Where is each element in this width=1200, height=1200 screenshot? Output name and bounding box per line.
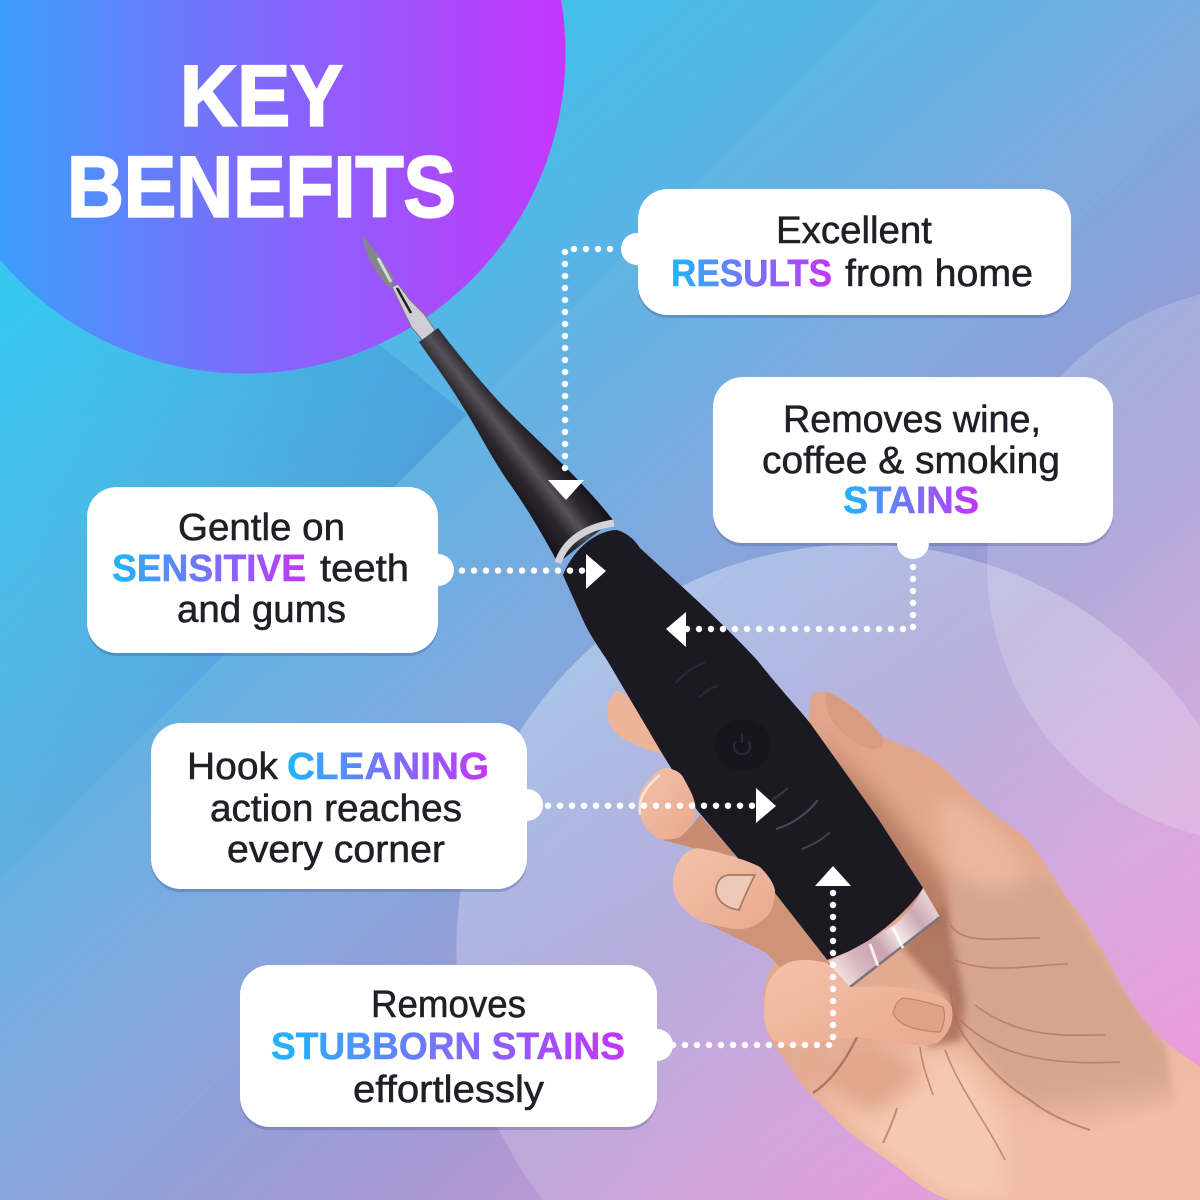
title: KEY: KEY bbox=[180, 48, 343, 144]
callout: stubborn stains bbox=[240, 965, 673, 1130]
palm creases bbox=[813, 925, 1120, 1160]
palm and thumb bbox=[763, 692, 1200, 1200]
line 2: coffee & smoking bbox=[762, 440, 1060, 482]
highlight: CLEANING bbox=[287, 746, 489, 788]
title: BENEFITS: BENEFITS bbox=[67, 140, 456, 236]
arrow bbox=[586, 554, 606, 589]
hand shading bbox=[815, 735, 1200, 1200]
lower finger nail bbox=[893, 998, 944, 1032]
thumb nail bbox=[826, 692, 884, 749]
connector: stains bbox=[666, 567, 913, 647]
line 1: Excellent bbox=[776, 210, 932, 252]
arrow bbox=[815, 866, 851, 886]
highlight: STAINS bbox=[843, 480, 979, 522]
callout: sensitive bbox=[87, 487, 454, 656]
title badge bbox=[0, 0, 566, 374]
highlight: STUBBORN STAINS bbox=[271, 1026, 625, 1068]
device: chrome collar bbox=[558, 523, 614, 563]
line 1: Hook bbox=[187, 746, 279, 788]
callout: cleaning bbox=[151, 723, 543, 892]
lower finger bbox=[764, 960, 952, 1047]
highlight: RESULTS bbox=[671, 253, 832, 295]
line 2: action reaches bbox=[210, 788, 462, 830]
highlight: SENSITIVE bbox=[112, 548, 306, 590]
callout: results bbox=[621, 189, 1071, 318]
second finger nail edge bbox=[640, 775, 660, 815]
arrow bbox=[548, 480, 584, 500]
line 3: and gums bbox=[177, 589, 346, 631]
second finger bbox=[638, 768, 695, 839]
finger web shadow bbox=[663, 815, 737, 857]
indicator arcs bbox=[675, 662, 830, 849]
arrow bbox=[756, 788, 776, 823]
line 3: every corner bbox=[227, 829, 445, 871]
line 2: teeth bbox=[320, 548, 409, 590]
device: tip bbox=[362, 235, 435, 342]
connector: stubborn stains bbox=[672, 866, 851, 1045]
connector: sensitive bbox=[462, 554, 606, 589]
line 1: Gentle on bbox=[178, 507, 345, 549]
line 2: from home bbox=[845, 253, 1033, 295]
connector: results bbox=[548, 249, 610, 500]
middle finger bbox=[673, 848, 775, 929]
connector: cleaning bbox=[548, 788, 776, 823]
line 1: Removes wine, bbox=[783, 399, 1041, 441]
index fingertip bbox=[607, 691, 665, 755]
line 1: Removes bbox=[371, 984, 526, 1026]
fingers in front of device bbox=[638, 768, 952, 1047]
middle finger nail bbox=[716, 875, 755, 910]
power button bbox=[715, 719, 771, 771]
device: handle bbox=[563, 530, 923, 960]
arrow bbox=[666, 612, 686, 647]
device: tapered neck bbox=[419, 328, 613, 563]
hand: behind device bbox=[607, 691, 1200, 1200]
callout: stains bbox=[713, 377, 1113, 559]
line 3: effortlessly bbox=[353, 1069, 544, 1111]
device: clear base bbox=[827, 888, 940, 987]
